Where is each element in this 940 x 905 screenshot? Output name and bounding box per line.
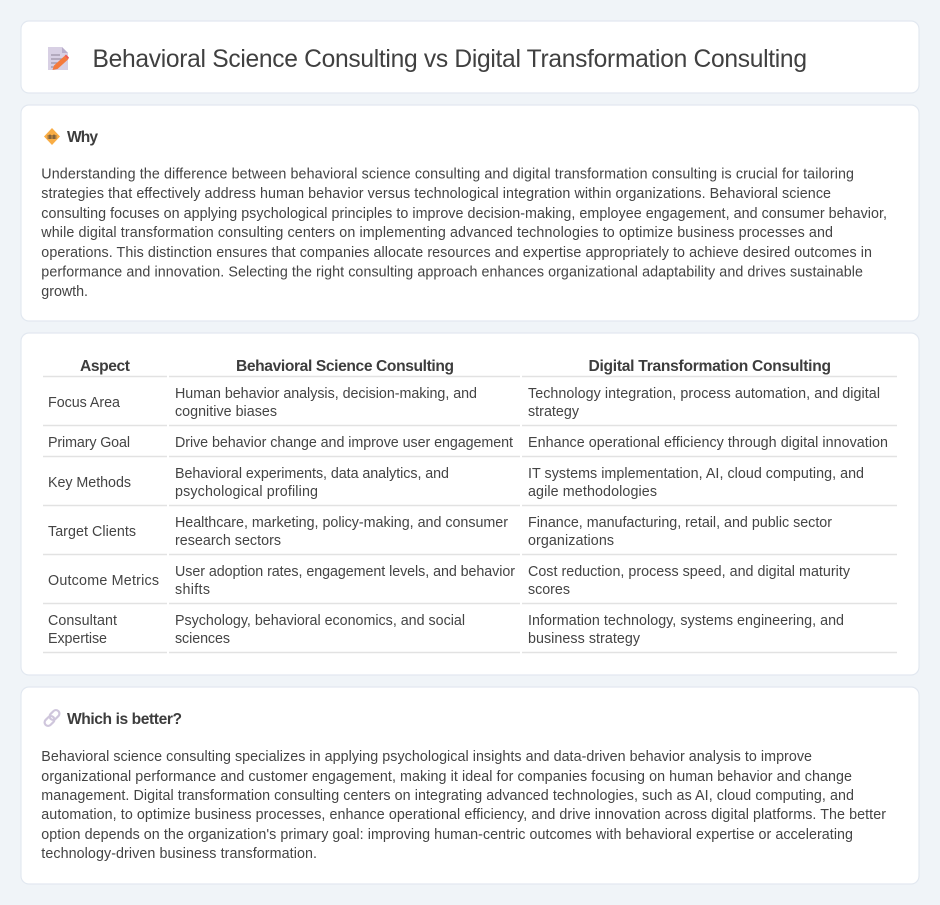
panel: title — [21, 21, 919, 93]
row: outcome metrics: Cost reduction, process speed, and digital maturity — [528, 564, 851, 580]
row: focus area: cognitive biases — [175, 404, 277, 420]
row: key methods: agile methodologies — [528, 484, 657, 500]
panel: which is better — [21, 687, 919, 884]
row: consultant expertise: Consultant — [48, 613, 117, 629]
row: consultant expertise: Expertise — [48, 631, 107, 647]
text block: why paragraph: strategies that effectively address human behavior versus technological integration within organizations. Behavioral science — [41, 186, 831, 202]
row: focus area: Focus Area — [48, 395, 120, 411]
row: outcome metrics: Outcome Metrics — [48, 573, 159, 589]
row: key methods: Key Methods — [48, 475, 131, 491]
row: key methods: Behavioral experiments, data analytics, and — [175, 466, 449, 482]
row: target clients: Finance, manufacturing, retail, and public sector — [528, 515, 832, 531]
text block: why paragraph: while digital transformation consulting centers on implementing advanced technologies to optimize business processes and — [40, 225, 833, 241]
row: consultant expertise: business strategy — [528, 631, 641, 647]
row: key methods — [48, 466, 864, 500]
row: focus area: Human behavior analysis, decision-making, and — [175, 386, 477, 402]
row: primary goal — [48, 435, 888, 451]
row: focus area: Technology integration, process automation, and digital — [528, 386, 880, 402]
row: target clients: Target Clients — [48, 524, 136, 540]
row: consultant expertise: Psychology, behavioral economics, and social — [175, 613, 465, 629]
row: primary goal: Drive behavior change and improve user engagement — [175, 435, 513, 451]
table header row — [80, 358, 831, 375]
heading: why: Why — [67, 129, 98, 146]
row: target clients: research sectors — [175, 533, 281, 549]
text block: which is better paragraph — [41, 749, 886, 862]
panel: why — [21, 105, 919, 321]
row: primary goal: Primary Goal — [48, 435, 130, 451]
text block: which is better paragraph: management. Digital transformation consulting centers on integrating advanced technologies, such as AI, cloud computing, and — [41, 788, 854, 804]
row: primary goal: Enhance operational efficiency through digital innovation — [528, 435, 888, 451]
row: outcome metrics: scores — [528, 582, 570, 598]
heading: page title: Behavioral Science Consulting vs Digital Transformation Consulting — [92, 46, 807, 73]
text block: which is better paragraph: organizational performance and customer engagement, making it ideal for companies focusing on human behavior and change — [41, 769, 852, 785]
text block: which is better paragraph: option depends on the organization's primary goal: improving human-centric outcomes with behavioral expertise or accelerating — [41, 827, 853, 843]
text block: why paragraph — [40, 167, 887, 300]
row: consultant expertise: sciences — [175, 631, 230, 647]
row: focus area: strategy — [528, 404, 580, 420]
text block: which is better paragraph: automation, to optimize business processes, enhance operational efficiency, and drive innovation across digital platforms. The better — [41, 807, 886, 823]
heading: which is better: Which is better? — [67, 711, 182, 728]
text block: why paragraph: Understanding the difference between behavioral science consulting and digital transformation consulting is crucial for tailoring — [41, 167, 854, 183]
table header row: Digital Transformation Consulting — [588, 358, 831, 375]
icon: orange diamond — [44, 128, 60, 145]
icon: document with pencil — [48, 47, 69, 70]
row: outcome metrics — [48, 564, 851, 598]
text block: which is better paragraph: technology-driven business transformation. — [41, 846, 317, 862]
row: target clients — [48, 515, 832, 549]
table row lines — [43, 376, 897, 652]
row: key methods: IT systems implementation, AI, cloud computing, and — [528, 466, 864, 482]
row: consultant expertise — [48, 613, 844, 647]
icon: chain link — [43, 709, 61, 727]
row: target clients: organizations — [528, 533, 614, 549]
text block: why paragraph: consulting focuses on applying psychological principles to improve decision-making, employee engagement, and consumer behavior, — [41, 206, 887, 222]
text block: why paragraph: growth. — [41, 284, 88, 300]
row: key methods: psychological profiling — [175, 484, 318, 500]
text block: why paragraph: operations. This distinction ensures that companies allocate resources and expertise appropriately to achieve desired outcomes in — [41, 245, 872, 261]
text block: which is better paragraph: Behavioral science consulting specializes in applying psychological insights and data-driven behavior analysis to improve — [41, 749, 812, 765]
row: outcome metrics: shifts — [175, 582, 210, 598]
table header row: Aspect — [80, 358, 130, 375]
panel: comparison table — [21, 333, 919, 675]
row: outcome metrics: User adoption rates, engagement levels, and behavior — [175, 564, 515, 580]
table header row: Behavioral Science Consulting — [236, 358, 454, 375]
row: focus area — [48, 386, 880, 420]
row: target clients: Healthcare, marketing, policy-making, and consumer — [175, 515, 508, 531]
row: consultant expertise: Information technology, systems engineering, and — [528, 613, 844, 629]
text block: why paragraph: performance and innovation. Selecting the right consulting approach enhances organizational adaptability and drives sustainable — [41, 265, 863, 281]
